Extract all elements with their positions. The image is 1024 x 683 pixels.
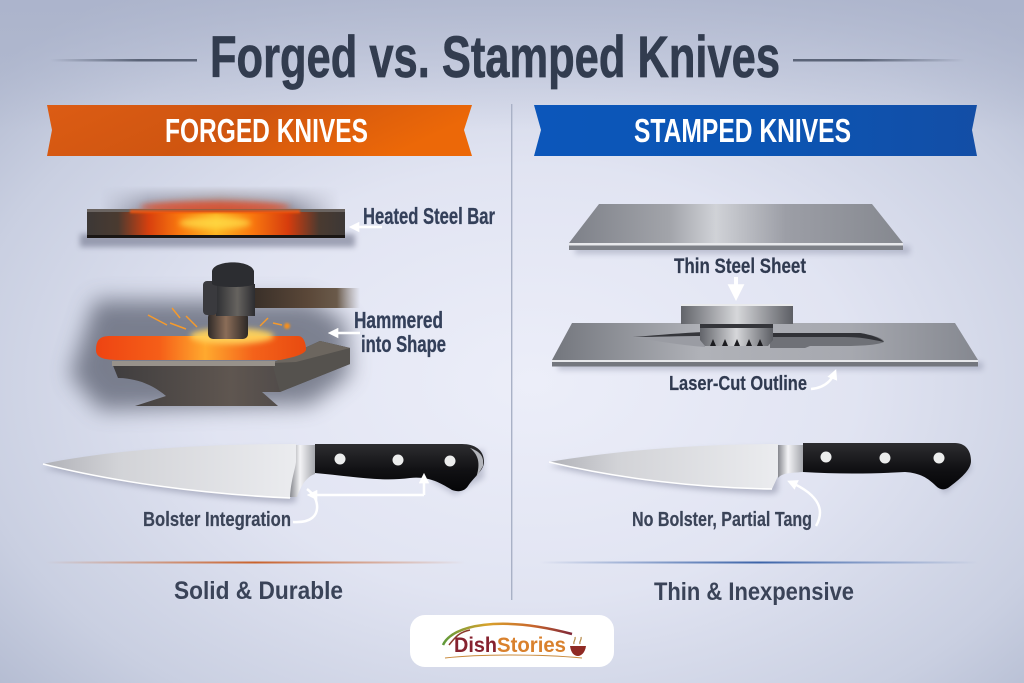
label: no bolster, partial tang: No Bolster, Partial Tang <box>632 509 812 531</box>
illustration: thin steel sheet <box>569 204 910 254</box>
label: no bolster, partial tang <box>632 482 820 531</box>
illustration: hammer and anvil <box>70 262 360 410</box>
banner: stamped knives: STAMPED KNIVES <box>634 112 851 149</box>
label: hammered into shape <box>331 307 446 357</box>
illustration: heated steel bar <box>80 186 355 247</box>
centre divider <box>511 104 512 600</box>
illustration: stamped knife <box>549 443 971 494</box>
rule: forged <box>45 562 465 564</box>
caption: thin and inexpensive: Thin & Inexpensive <box>654 578 854 606</box>
panel: stamped knives <box>534 105 983 606</box>
banner: forged knives: FORGED KNIVES <box>165 112 368 149</box>
label: hammered into shape: into Shape <box>361 331 446 357</box>
caption: solid and durable: Solid & Durable <box>174 577 343 605</box>
banner: stamped knives <box>534 105 977 156</box>
panel: forged knives <box>43 105 495 605</box>
title: Forged vs. Stamped Knives <box>210 25 780 90</box>
label: bolster integration <box>143 476 424 531</box>
logo: DishStories: Dish <box>454 634 497 657</box>
label: thin steel sheet: Thin Steel Sheet <box>674 255 806 278</box>
illustration: forged knife <box>43 444 484 503</box>
label: bolster integration: Bolster Integration <box>143 509 291 531</box>
label: thin steel sheet <box>674 255 806 296</box>
label: heated steel bar: Heated Steel Bar <box>363 203 495 229</box>
label: laser-cut outline: Laser-Cut Outline <box>669 372 807 395</box>
label: hammered into shape: Hammered <box>354 307 443 333</box>
logo: DishStories: Stories <box>497 634 566 657</box>
logo: DishStories <box>410 615 614 667</box>
illustration: stamping press and laser-cut sheet <box>552 304 983 370</box>
banner: forged knives <box>47 105 472 156</box>
rule: stamped <box>540 562 978 564</box>
